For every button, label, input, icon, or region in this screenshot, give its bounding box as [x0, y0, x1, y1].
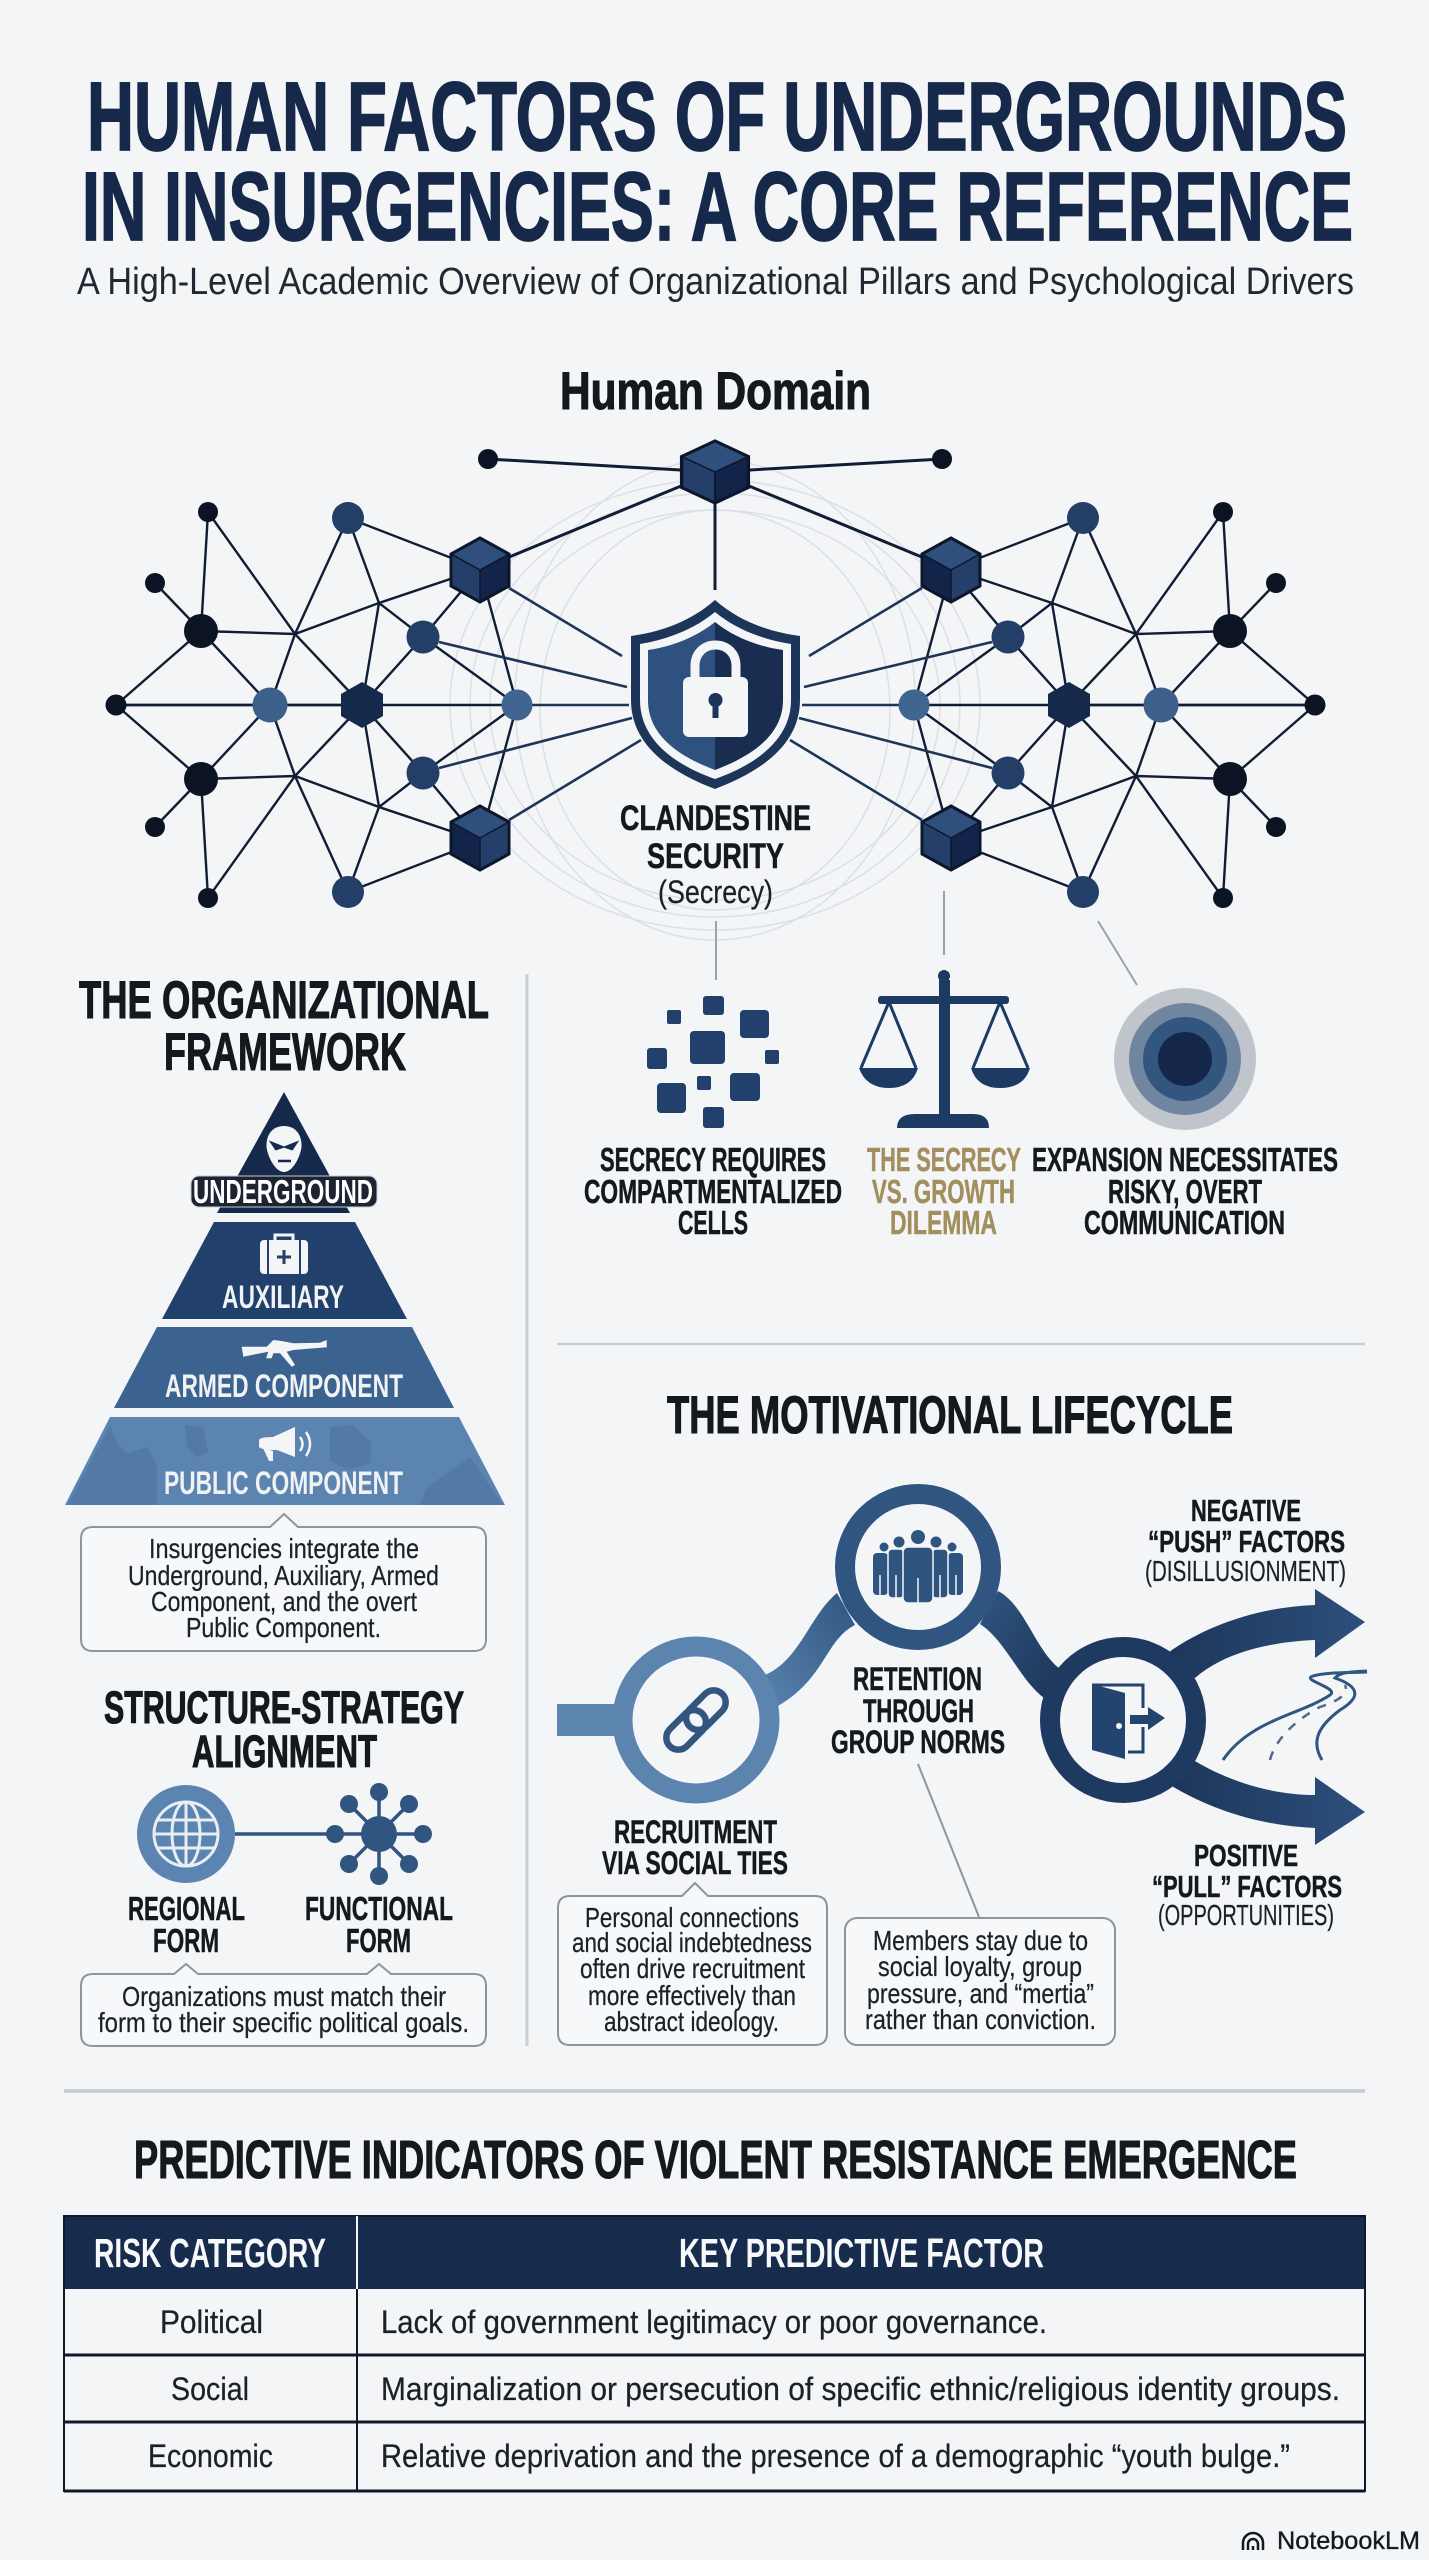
table row: economic: Economic	[148, 2438, 273, 2474]
label: regional form: FORM	[153, 1922, 219, 1959]
callout: insurgencies integrate: Public Component.	[186, 1612, 381, 1643]
label: functional form: FORM	[346, 1922, 411, 1959]
callout: personal connections: abstract ideology.	[604, 2006, 779, 2037]
text: secrecy requires compartmentalized cells: COMPARTMENTALIZED	[584, 1173, 842, 1210]
table row: political: Lack of government legitimacy or poor governance.	[381, 2304, 1047, 2340]
icon: compartmentalized cells	[647, 996, 779, 1128]
label: clandestine security: SECURITY	[647, 837, 784, 876]
ring: retention	[845, 1494, 991, 1640]
callout: members stay	[845, 1918, 1115, 2045]
callout: personal connections: and social indebtedness	[572, 1927, 812, 1958]
ring: recruitment	[622, 1646, 770, 1794]
tier: public component: PUBLIC COMPONENT	[164, 1465, 403, 1501]
callout: personal connections	[558, 1883, 827, 2045]
label: recruitment via social ties	[602, 1814, 788, 1881]
icon: shield with padlock	[631, 600, 800, 789]
pyramid: organizational framework	[65, 1092, 505, 1505]
text: expansion necessitates risky communication	[1032, 1141, 1338, 1241]
text: the secrecy vs growth dilemma: THE SECRECY	[867, 1141, 1021, 1178]
callout: insurgencies integrate: Underground, Auxiliary, Armed	[128, 1560, 439, 1591]
label: negative push factors: NEGATIVE	[1191, 1493, 1301, 1528]
text: secrecy requires compartmentalized cells	[584, 1141, 842, 1241]
label: positive pull factors: POSITIVE	[1194, 1838, 1298, 1873]
callout: insurgencies integrate: Component, and the overt	[151, 1586, 417, 1617]
text: expansion necessitates risky communication: COMMUNICATION	[1084, 1204, 1285, 1241]
icon: balance scale	[859, 970, 1030, 1128]
label: retention through group norms: GROUP NORMS	[831, 1724, 1005, 1760]
callout: organizations must match	[81, 1964, 486, 2046]
callout: insurgencies integrate	[81, 1514, 486, 1651]
text: secrecy requires compartmentalized cells: SECRECY REQUIRES	[600, 1141, 826, 1178]
tier: underground: UNDERGROUND	[193, 1173, 373, 1210]
table row: economic: Relative deprivation and the presence of a demographic “youth bulge.”	[381, 2438, 1290, 2474]
label: clandestine security: (Secrecy)	[658, 874, 773, 910]
text: the secrecy vs growth dilemma: VS. GROWTH	[872, 1173, 1015, 1210]
heading: the organizational framework	[79, 971, 489, 1082]
heading: structure-strategy alignment	[104, 1682, 464, 1777]
text: expansion necessitates risky communication: RISKY, OVERT	[1108, 1173, 1262, 1210]
tier: armed component: ARMED COMPONENT	[165, 1368, 403, 1404]
icon: winding road	[1223, 1671, 1367, 1760]
tier: underground	[191, 1092, 377, 1213]
title	[82, 62, 1353, 261]
label: functional form: FUNCTIONAL	[305, 1890, 453, 1927]
label: recruitment via social ties: VIA SOCIAL TIES	[602, 1845, 788, 1881]
callout: members stay: rather than conviction.	[865, 2004, 1096, 2035]
tier: auxiliary: AUXILIARY	[222, 1279, 344, 1315]
connector lines from shield	[716, 891, 1137, 985]
heading: human domain: Human Domain	[560, 362, 871, 421]
label: negative push factors	[1145, 1493, 1346, 1588]
table row: social: Marginalization or persecution of specific ethnic/religious identity groups.	[381, 2371, 1340, 2407]
text: the secrecy vs growth dilemma	[867, 1141, 1021, 1241]
table header	[64, 2216, 1365, 2289]
tier: armed component	[114, 1327, 454, 1408]
callout: organizations must match: form to their specific political goals.	[98, 2007, 469, 2038]
icon: concentric signal circles	[1114, 988, 1256, 1130]
label: functional form	[305, 1890, 453, 1959]
label: positive pull factors: “PULL” FACTORS	[1152, 1869, 1342, 1904]
text: the secrecy vs growth dilemma: DILEMMA	[890, 1204, 997, 1241]
segment: entry bar	[557, 1704, 627, 1736]
table borders	[64, 2216, 1365, 2491]
segment: recruitment to retention	[765, 1593, 855, 1707]
icon: regional globe	[137, 1785, 235, 1883]
callout: personal connections: more effectively than	[588, 1980, 796, 2011]
icon: functional network	[326, 1783, 432, 1885]
segment: retention to exit	[980, 1591, 1060, 1698]
heading: the organizational framework: THE ORGANIZATIONAL	[79, 971, 489, 1030]
heading: the organizational framework: FRAMEWORK	[164, 1023, 406, 1082]
callout: organizations must match: Organizations must match their	[122, 1981, 446, 2012]
ring: exit	[1050, 1647, 1196, 1793]
text: secrecy requires compartmentalized cells: CELLS	[678, 1204, 748, 1241]
label: retention through group norms	[831, 1661, 1005, 1760]
table header: RISK CATEGORY	[94, 2230, 326, 2276]
column divider	[526, 974, 528, 2046]
callout: personal connections: Personal connections	[585, 1902, 799, 1933]
label: negative push factors: “PUSH” FACTORS	[1148, 1524, 1345, 1559]
heading: structure-strategy alignment: ALIGNMENT	[192, 1726, 377, 1777]
tier: public component	[65, 1417, 505, 1505]
table row: social: Social	[171, 2371, 249, 2407]
label: clandestine security: CLANDESTINE	[620, 799, 811, 838]
label: regional form: REGIONAL	[128, 1890, 245, 1927]
table row: political: Political	[160, 2304, 263, 2340]
callout: insurgencies integrate: Insurgencies integrate the	[149, 1533, 419, 1564]
table header: KEY PREDICTIVE FACTOR	[679, 2230, 1044, 2276]
connector: regional to functional	[235, 1832, 330, 1836]
label: clandestine security	[620, 799, 811, 910]
label: recruitment via social ties: RECRUITMENT	[614, 1814, 777, 1850]
label: positive pull factors: (OPPORTUNITIES)	[1158, 1900, 1334, 1932]
callout: members stay: pressure, and “mertia”	[867, 1978, 1094, 2009]
callout: members stay: Members stay due to	[873, 1925, 1088, 1956]
label: positive pull factors	[1152, 1838, 1342, 1932]
logo: notebooklm: NotebookLM	[1277, 2527, 1420, 2555]
label: negative push factors: (DISILLUSIONMENT)	[1145, 1556, 1346, 1588]
arrow: positive pull	[1170, 1758, 1365, 1845]
tier: auxiliary	[162, 1222, 407, 1319]
label: regional form	[128, 1890, 245, 1959]
label: retention through group norms: RETENTION	[853, 1661, 982, 1697]
network diagram: human domain	[106, 441, 1326, 940]
heading: structure-strategy alignment: STRUCTURE-STRATEGY	[104, 1682, 464, 1733]
label: retention through group norms: THROUGH	[863, 1693, 974, 1729]
table: predictive factors	[64, 2216, 1365, 2491]
callout: members stay: social loyalty, group	[878, 1951, 1082, 1982]
lifecycle flow path	[557, 1589, 1365, 1845]
pointer line: retention to callout	[918, 1764, 979, 1917]
callout: personal connections: often drive recruitment	[580, 1953, 805, 1984]
arrow: negative push	[1165, 1589, 1365, 1678]
